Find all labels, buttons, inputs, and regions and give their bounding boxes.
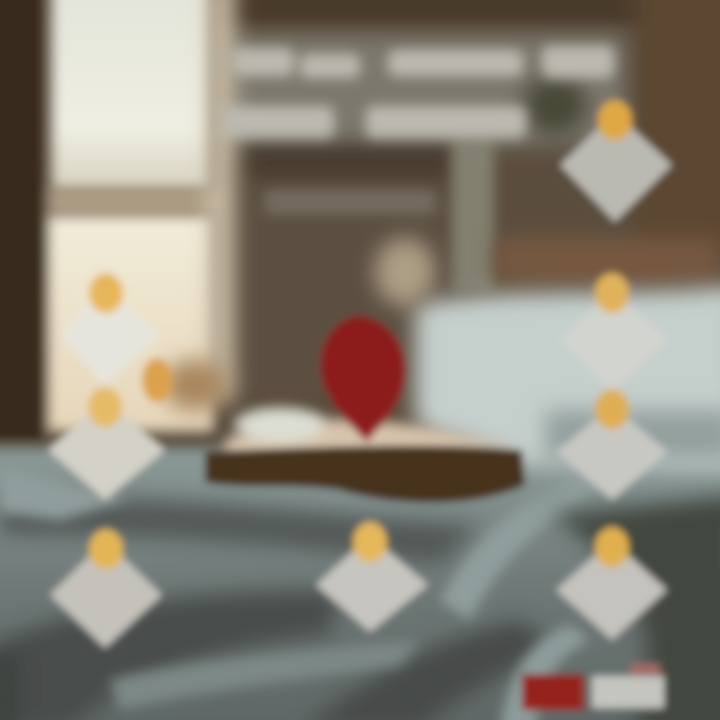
icon: amber marker (89, 273, 123, 313)
pillows (375, 238, 720, 470)
icon: amber marker (88, 387, 122, 427)
icon: amber marker (595, 273, 629, 313)
icon: amber marker (595, 389, 629, 429)
icon: amber marker (89, 529, 123, 569)
title block (wording illegible in reference) (222, 46, 614, 138)
callout: right column 4 (556, 527, 667, 640)
callout: right column 2 (558, 273, 670, 392)
logo badge (522, 664, 664, 710)
red vase (320, 315, 406, 442)
callout: right column 3 (556, 389, 668, 500)
callout: bottom centre (316, 522, 428, 632)
table top with white cloth (205, 408, 525, 502)
dried flowers on sill (163, 359, 227, 411)
callout: left column top (60, 273, 160, 385)
bed sheets (0, 448, 720, 720)
callout: right column 1 (560, 100, 672, 222)
icon: amber marker (353, 522, 387, 562)
left window post (0, 0, 42, 440)
callout: bottom left (50, 529, 162, 648)
icon: amber marker beside left column (142, 358, 172, 402)
icon: amber marker (595, 527, 629, 567)
window (48, 0, 234, 431)
callout: left column middle (48, 387, 165, 500)
icon: amber marker (598, 100, 632, 140)
